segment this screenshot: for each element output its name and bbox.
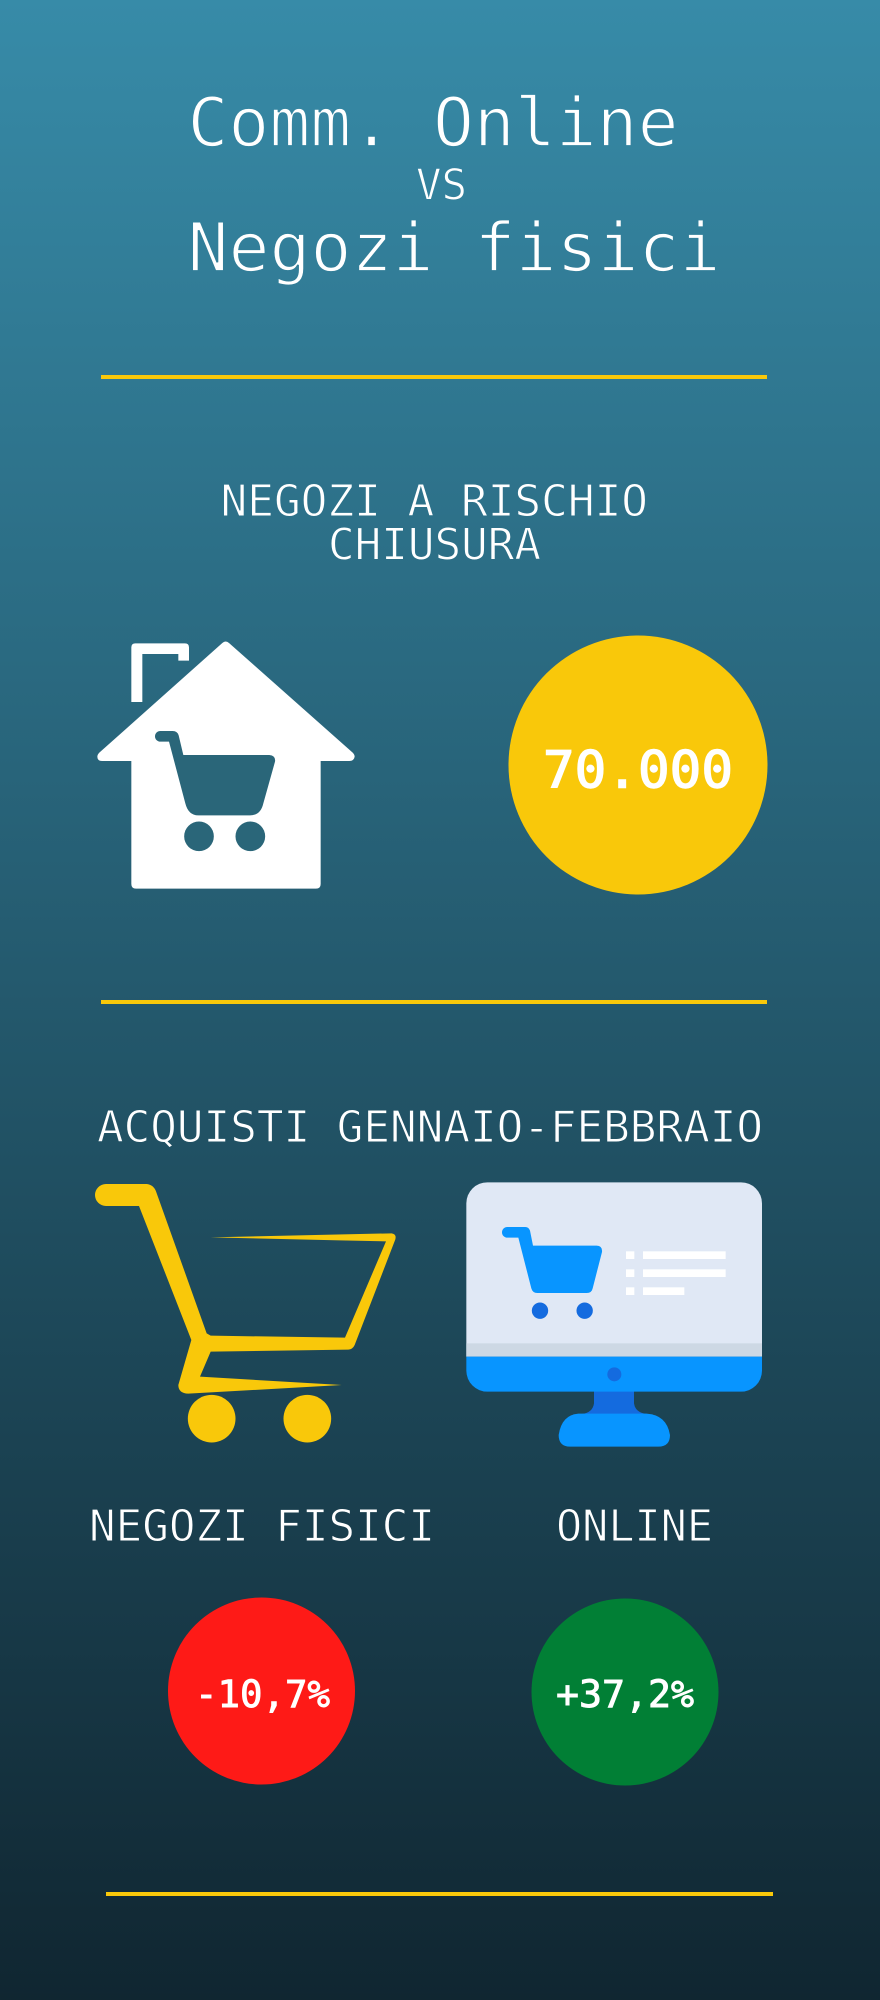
icon: computer monitor with cart [466, 1182, 762, 1447]
title: VS [416, 162, 467, 210]
label: negozi fisici: NEGOZI FISICI [89, 1501, 435, 1552]
title: Negozi fisici [188, 208, 720, 287]
stat: negozi fisici -10,7%: -10,7% [195, 1673, 330, 1716]
heading: negozi a rischio chiusura: NEGOZI A RISCHIO [220, 476, 648, 527]
icon: yellow shopping cart [95, 1184, 396, 1442]
heading: negozi a rischio chiusura: CHIUSURA [328, 520, 541, 570]
heading: negozi a rischio chiusura [220, 476, 648, 570]
stat: online +37,2%: +37,2% [556, 1673, 694, 1716]
stat: negozi fisici -10,7% [168, 1598, 355, 1784]
icon: house with shopping cart [97, 641, 355, 889]
title [188, 83, 720, 287]
title: Comm. Online [188, 83, 678, 162]
label: online: ONLINE [556, 1501, 713, 1552]
stat: online +37,2% [532, 1598, 718, 1786]
stat: 70.000 [508, 636, 768, 894]
stat: 70.000: 70.000 [543, 742, 733, 800]
heading: acquisti gennaio-febbraio: ACQUISTI GENNAIO-FEBBRAIO [97, 1102, 763, 1153]
